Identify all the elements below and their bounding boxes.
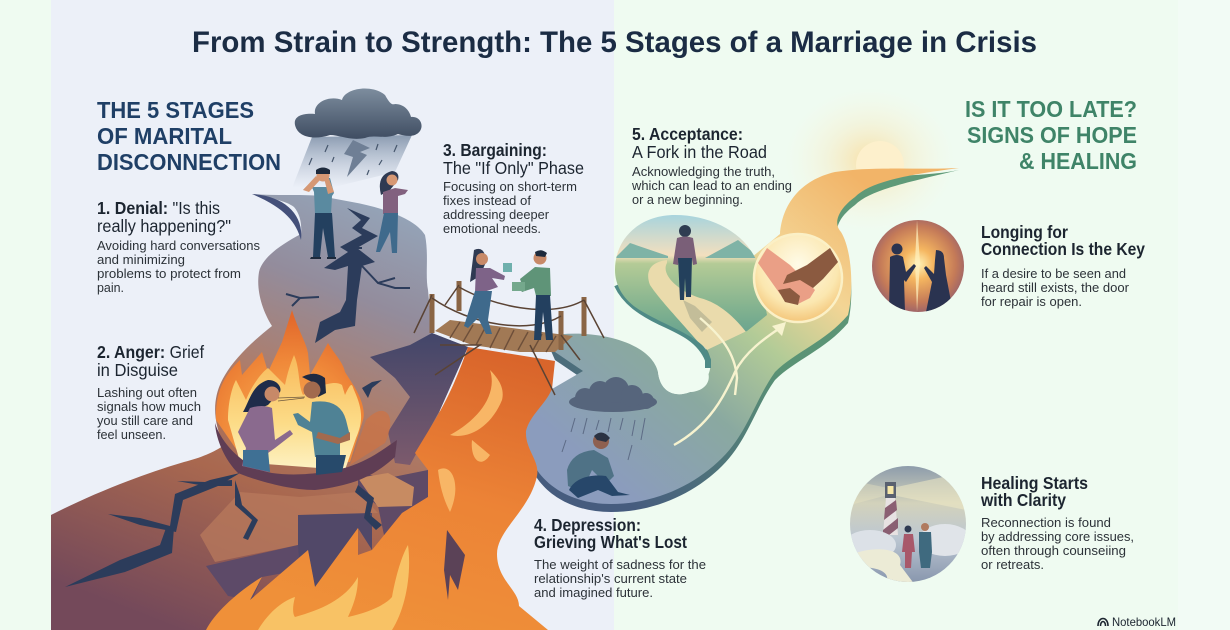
logo: NotebookLM: NotebookLM [1112, 615, 1176, 629]
text: stage 1 denial: and minimizing [97, 252, 185, 267]
figure: woman offering [464, 249, 505, 334]
text: stage 3 bargaining: fixes instead of [443, 193, 531, 208]
text: stage 3 bargaining: addressing deeper [443, 207, 550, 222]
river of fire [206, 347, 555, 630]
text: longing for connection: Longing for [981, 222, 1068, 242]
stage 3: rope bridge and couple [414, 249, 604, 395]
text: stage 2 anger: Lashing out often [97, 385, 197, 400]
text: stage 2 anger: you still care and [97, 413, 193, 428]
icon: lightning [344, 140, 370, 177]
text: stage 1 denial [97, 198, 260, 295]
cliff: cracking ground [51, 194, 468, 630]
text: stage 2 anger: in Disguise [97, 360, 178, 380]
text: stage 4 depression: 4. Depression: [534, 515, 641, 535]
icon: lighthouse and couple [850, 466, 966, 582]
text: stage 5 acceptance: or a new beginning. [632, 192, 743, 207]
title: From Strain to Strength: The 5 Stages of a Marriage in Crisis [192, 26, 1037, 59]
text: stage 2 anger: feel unseen. [97, 427, 166, 442]
text: healing starts with clarity [980, 473, 1134, 572]
cloud [569, 377, 657, 412]
bridge abutment shadow [370, 333, 468, 465]
stepped rock blocks [358, 470, 428, 540]
heading: five stages: THE 5 STAGES [97, 97, 254, 123]
winding road from depression to hope [525, 168, 959, 512]
rim of pit [215, 423, 397, 490]
road surface [525, 168, 959, 504]
stage 1: storm cloud and couple [292, 89, 422, 259]
text: stage 4 depression: The weight of sadness for the [534, 557, 706, 572]
text: longing for connection: Connection Is the Key [981, 239, 1145, 259]
figure: man walking [673, 225, 697, 300]
text: stage 2 anger: signals how much [97, 399, 201, 414]
heading: five stages: DISCONNECTION [97, 149, 281, 175]
text: healing starts with clarity: Reconnection is found [981, 515, 1111, 530]
text: stage 1 denial: really happening?" [97, 216, 231, 236]
text: stage 2 anger [97, 342, 204, 442]
text: stage 4 depression: and imagined future. [534, 585, 653, 600]
text: longing for connection [981, 222, 1145, 309]
text: longing for connection: for repair is open. [981, 294, 1082, 309]
text: stage 3 bargaining: 3. Bargaining: [443, 140, 547, 160]
outer flames [216, 310, 364, 462]
text: healing starts with clarity: by addressing core issues, [981, 529, 1134, 544]
figure: man offering [512, 250, 553, 340]
figure: man covering face [303, 168, 336, 259]
text: stage 5 acceptance [631, 124, 792, 207]
text: stage 5 acceptance: 5. Acceptance: [632, 124, 743, 144]
icon: couple reaching at sunset [872, 220, 964, 312]
text: stage 5 acceptance: Acknowledging the truth, [632, 164, 775, 179]
text: stage 3 bargaining: emotional needs. [443, 221, 541, 236]
sunrise glow and sun [807, 107, 932, 212]
text: stage 1 denial: pain. [97, 280, 124, 295]
speech lines [278, 397, 305, 401]
top-lit rock tile [200, 492, 378, 562]
text: stage 3 bargaining: Focusing on short-term [443, 179, 577, 194]
flames in river [438, 370, 503, 512]
text: stage 4 depression: Grieving What's Lost [534, 532, 687, 552]
icon: gift [503, 263, 512, 272]
fissure crack in top rock [315, 208, 378, 343]
heading: signs of hope [965, 96, 1137, 174]
text: longing for connection: heard still exists, the door [981, 280, 1130, 295]
text: healing starts with clarity: Healing Starts [981, 473, 1088, 493]
text: stage 4 depression [534, 515, 706, 600]
figure: woman covering face [376, 171, 408, 253]
text: stage 5 acceptance: which can lead to an ending [631, 178, 792, 193]
lower cracks [65, 380, 382, 587]
road edge depth [525, 170, 959, 512]
text: healing starts with clarity: often through counseiing [981, 543, 1126, 558]
heading: five stages: OF MARITAL [97, 123, 232, 149]
text: healing starts with clarity: or retreats. [981, 557, 1044, 572]
stage 4: depression rain cloud and figure [562, 377, 657, 498]
text: stage 1 denial: 1. Denial: "Is this [97, 198, 220, 218]
heading: signs of hope: SIGNS OF HOPE [967, 122, 1137, 148]
text: healing starts with clarity: with Clarity [980, 490, 1066, 510]
figure: man arguing [293, 374, 350, 475]
heading: signs of hope: IS IT TOO LATE? [965, 96, 1137, 122]
figure: woman arguing [238, 380, 293, 472]
stage 5: green fork scene [615, 215, 767, 368]
text: stage 1 denial: Avoiding hard conversations [97, 238, 260, 253]
dark ledge under top surface [252, 194, 301, 240]
text: longing for connection: If a desire to be seen and [981, 266, 1126, 281]
text: stage 1 denial: problems to protect from [97, 266, 241, 281]
icon: handshake circle [754, 234, 842, 322]
heading: signs of hope: & HEALING [1019, 148, 1137, 174]
text: stage 3 bargaining [443, 140, 584, 236]
icon: cloud [295, 89, 422, 139]
stage 2: fire pit with arguing couple [215, 310, 397, 490]
inlet mask below heart [640, 340, 709, 394]
path arrows [674, 318, 786, 445]
text: stage 2 anger: 2. Anger: Grief [97, 342, 204, 362]
inner flames [228, 355, 361, 470]
text: stage 3 bargaining: The "If Only" Phase [443, 158, 584, 178]
text: stage 4 depression: relationship's current state [534, 571, 687, 586]
text: stage 5 acceptance: A Fork in the Road [632, 142, 767, 162]
yellow base flames [258, 545, 409, 630]
heading: five stages [97, 97, 281, 175]
figure: seated man [567, 432, 630, 498]
